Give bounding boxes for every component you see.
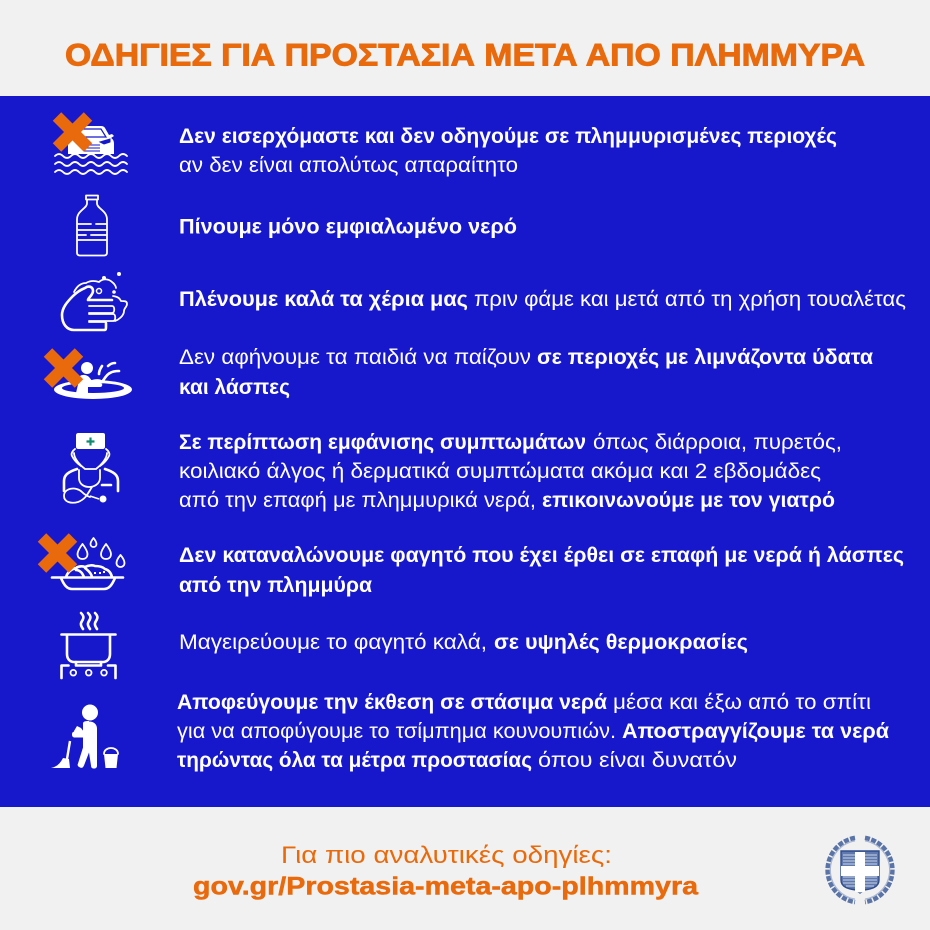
row 2: bottled water [77,196,517,256]
icon: Greek coat of arms [828,838,892,902]
text: children in stagnant water: σε περιοχές με λιμνάζοντα ύδατα [537,346,873,369]
text: bottled water: Πίνουμε μόνο εμφιαλωμένο νερό [179,216,517,238]
icon: soapy hands [62,272,127,330]
text: cook well: σε υψηλές θερμοκρασίες [494,631,748,654]
footer text: Για πιο αναλυτικές οδηγίες: [281,842,612,869]
text: symptoms: Σε περίπτωση εμφάνισης συμπτωμάτων [179,431,586,454]
row 8: stagnant water [51,691,889,772]
panel: instructions background [0,96,930,807]
icon: water bottle [77,196,107,256]
text: flooded roads [179,125,837,177]
text: wash hands: Πλένουμε καλά τα χέρια μας [179,288,468,311]
row 3: wash hands [62,272,906,330]
icon: person cleaning with mop and bucket [51,704,118,768]
footer text [193,842,699,900]
footer band [0,807,930,930]
row 6: contaminated food [42,538,904,597]
text: stagnant water [177,691,889,772]
text: stagnant water: Αποφεύγουμε την έκθεση σε στάσιμα νερά [177,691,607,714]
icon: child in water crossed out [48,352,132,399]
text: flooded roads: Δεν εισερχόμαστε και δεν οδηγούμε σε πλημμυρισμένες περιοχές [179,125,837,148]
text: flooded roads: αν δεν είναι απολύτως απαραίτητο [179,154,518,177]
text: contaminated food: Δεν καταναλώνουμε φαγητό που έχει έρθει σε επαφή με νερά ή λάσπες [179,544,904,567]
text: stagnant water: όπου είναι δυνατόν [538,749,737,772]
footer text: gov.gr/Prostasia-meta-apo-plhmmyra [193,872,699,900]
text: wash hands: πριν φάμε και μετά από τη χρήση τουαλέτας [474,288,906,311]
text: stagnant water: για να αποφύγουμε το τσίμπημα κουνουπιών. [177,720,616,743]
text: symptoms: όπως διάρροια, πυρετός, [593,431,842,454]
text: children in stagnant water: Δεν αφήνουμε τα παιδιά να παίζουν [179,346,531,369]
icon: steaming pot on stove [62,613,116,678]
row 7: cook well [62,613,748,678]
text: symptoms [179,431,842,512]
text: children in stagnant water: και λάσπες [179,376,290,399]
icon: food plate with drops crossed out [42,538,124,589]
row 1: flooded roads [55,116,837,177]
text: symptoms: κοιλιακό άλγος ή δερματικά συμπτώματα ακόμα και 2 εβδομάδες [179,460,821,483]
text: stagnant water: μέσα και έξω από το σπίτι [613,691,871,714]
text: contaminated food [179,544,904,597]
icon: doctor with stethoscope [64,433,118,503]
header band [0,0,930,96]
icon: car in flood water crossed out [55,116,127,174]
text: symptoms: από την επαφή με πλημμυρικά νερά, [179,489,536,512]
text: contaminated food: από την πλημμύρα [179,574,372,597]
text: children in stagnant water [179,346,873,399]
text: wash hands [179,288,906,311]
text: stagnant water: Αποστραγγίζουμε τα νερά [622,720,889,743]
text: cook well [179,631,748,654]
text: symptoms: επικοινωνούμε με τον γιατρό [542,489,835,512]
row 4: children in stagnant water [48,346,873,399]
title: ΟΔΗΓΙΕΣ ΓΙΑ ΠΡΟΣΤΑΣΙΑ ΜΕΤΑ ΑΠΟ ΠΛΗΜΜΥΡΑ [65,36,865,72]
text: cook well: Μαγειρεύουμε το φαγητό καλά, [179,631,487,654]
row 5: symptoms [64,431,842,512]
text: stagnant water: τηρώντας όλα τα μέτρα προστασίας [177,749,532,772]
